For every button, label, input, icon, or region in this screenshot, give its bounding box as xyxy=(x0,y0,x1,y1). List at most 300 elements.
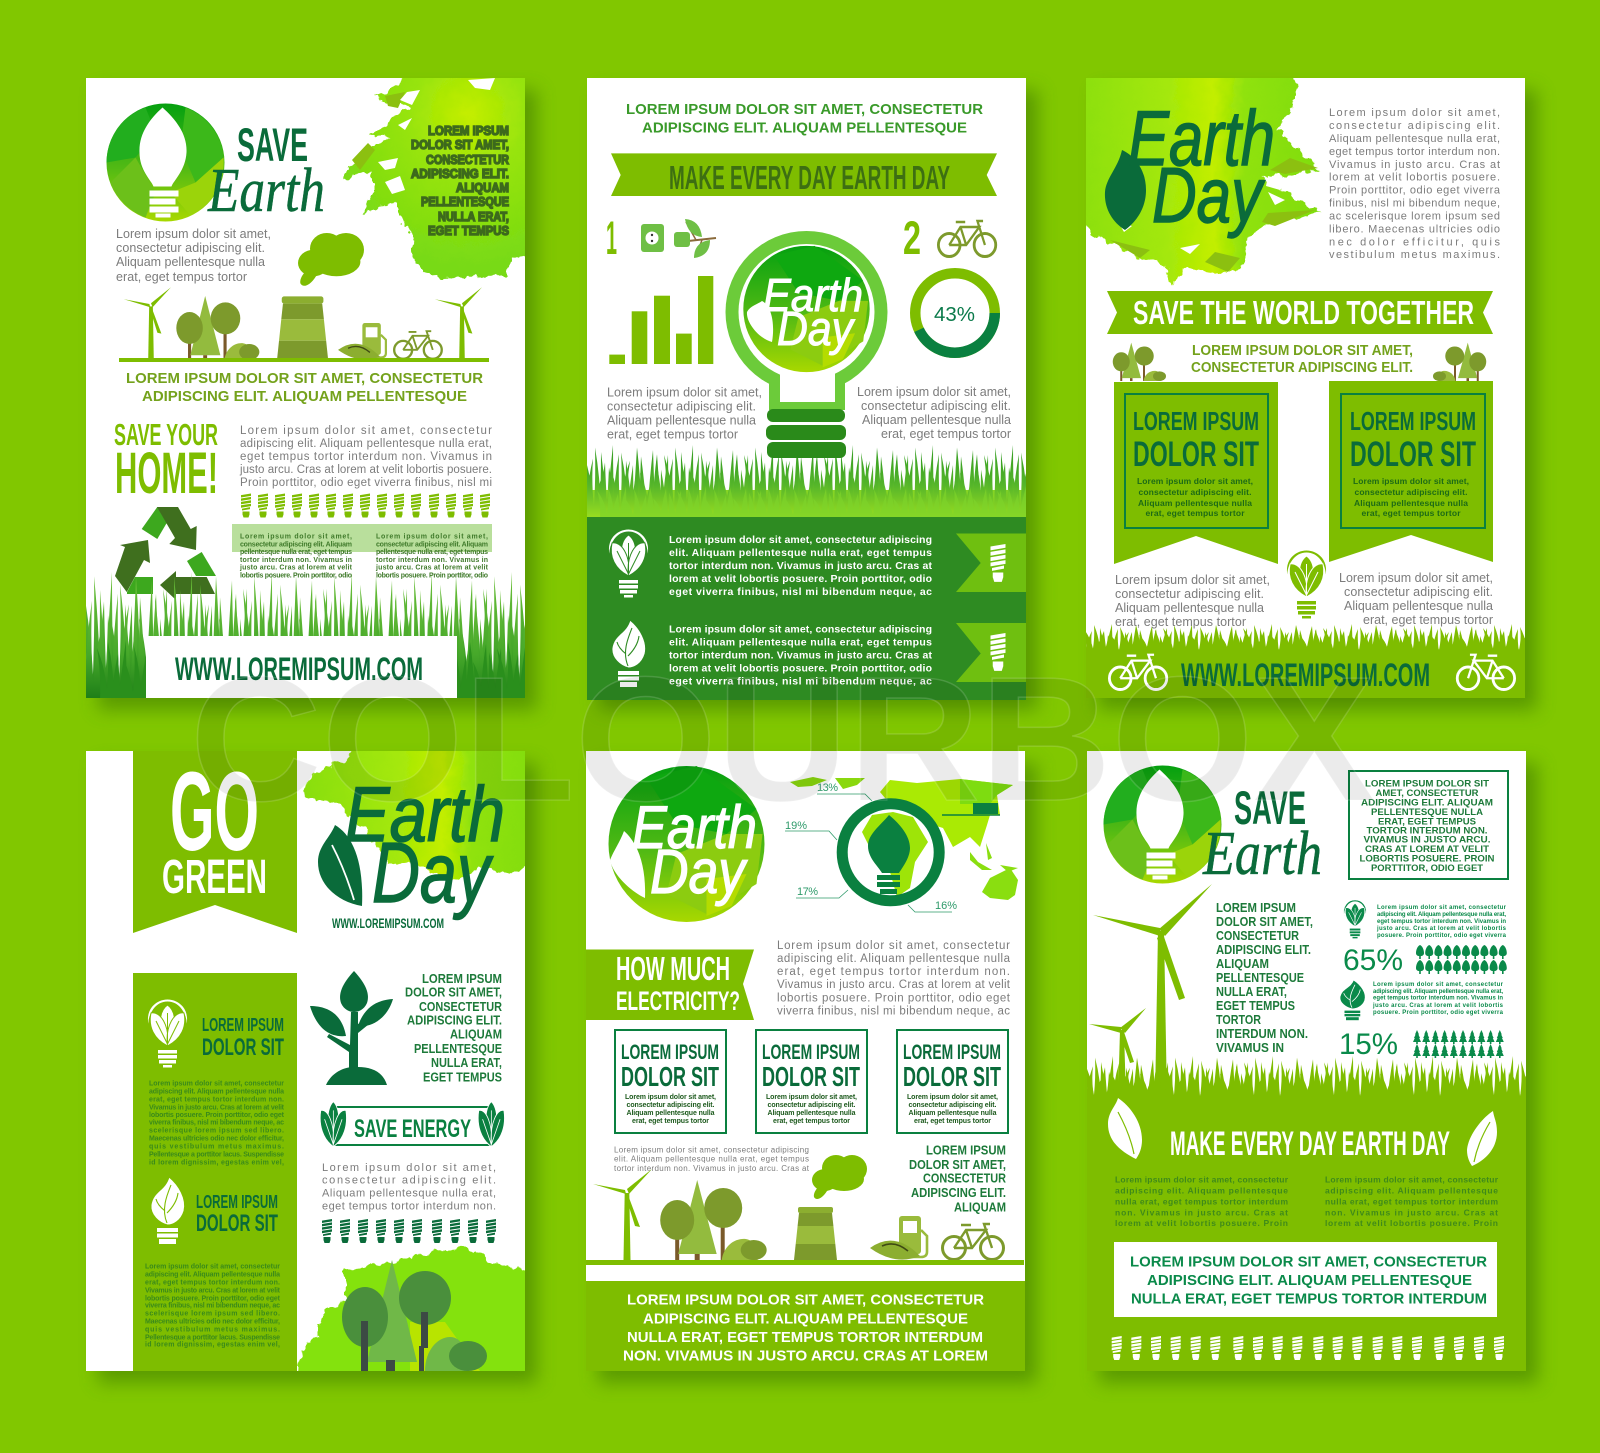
small text: tortor interdum non. Vivamus in justo arcu. Cras at xyxy=(614,1164,810,1173)
card 2 xyxy=(756,1030,867,1133)
list text: NULLA ERAT, xyxy=(1216,985,1287,999)
heading: ADIPISCING ELIT. ALIQUAM PELLENTESQUE xyxy=(642,120,967,136)
ribbon: how much electricity: HOW MUCH xyxy=(616,950,730,987)
right text: consectetur adipiscing elit. xyxy=(1344,585,1493,599)
band text 1: elit. Aliquam pellentesque nulla erat, eget tempus xyxy=(669,547,932,559)
card 2: Lorem ipsum dolor sit amet, xyxy=(766,1094,857,1101)
right heading text: ADIPISCING ELIT. xyxy=(911,1186,1006,1200)
side heading 1: LOREM IPSUM xyxy=(202,1015,284,1035)
icon: small leaf bulb xyxy=(1344,900,1366,938)
band text 1 xyxy=(669,534,932,598)
left text: erat, eget tempus tortor xyxy=(607,428,738,442)
card 3: DOLOR SIT xyxy=(903,1061,1001,1092)
left text: consectetur adipiscing elit. xyxy=(1115,587,1264,601)
text block: ac scelerisque lorem ipsum sed xyxy=(1329,210,1500,222)
body text: justo arcu. Cras at lorem at velit lobortis posuere. xyxy=(239,464,492,476)
icon: leaf bulb xyxy=(608,529,649,598)
heading: LOREM IPSUM DOLOR SIT AMET, CONSECTETUR xyxy=(626,101,983,118)
ribbon card left xyxy=(1114,382,1278,564)
banner: MAKE EVERY DAY EARTH DAY xyxy=(669,159,950,196)
ribbon card left: Lorem ipsum dolor sit amet, xyxy=(1137,476,1253,486)
small text: elit. Aliquam pellentesque nulla erat, eget tempus xyxy=(614,1154,809,1164)
subheading xyxy=(1191,343,1413,376)
panel: make every day earth day poster xyxy=(587,78,1026,700)
small text columns: justo arcu. Cras at lorem at velit xyxy=(375,564,489,572)
title: save earth: Earth xyxy=(207,157,325,225)
small text: Lorem ipsum dolor sit amet, consectetur adipiscing xyxy=(614,1146,809,1154)
right heading text: ALIQUAM xyxy=(954,1200,1006,1214)
text block: consectetur adipiscing elit. xyxy=(1329,120,1500,132)
boxed text: AMET, CONSECTETUR xyxy=(1376,788,1479,799)
two text columns: non. Vivamus in justo arcu. Cras at xyxy=(1115,1207,1288,1217)
title: earth day xyxy=(345,770,505,921)
map callouts: 17% xyxy=(797,886,818,898)
card 3: erat, eget tempus tortor xyxy=(914,1118,991,1125)
right text: PELLENTESQUE xyxy=(414,1042,502,1056)
panel: make every day earth day poster: 1 xyxy=(606,211,617,264)
right text xyxy=(405,972,502,1084)
card 2: erat, eget tempus tortor xyxy=(773,1118,850,1125)
small text columns: pellentesque nulla erat, eget tempus xyxy=(376,549,488,556)
heading: save your home: HOME! xyxy=(115,441,218,506)
bar chart xyxy=(609,276,713,364)
boxed text: VIVAMUS IN JUSTO ARCU. xyxy=(1364,835,1490,846)
side text 1: id lorem dignissim, egestas enim vel, xyxy=(149,1159,284,1166)
right text: Aliquam pellentesque nulla xyxy=(1344,599,1493,613)
right heading text: LOREM IPSUM xyxy=(926,1144,1006,1158)
card 1 xyxy=(615,1030,726,1133)
heading xyxy=(626,101,983,136)
side text 2: scelerisque lorem ipsum sed libero. xyxy=(145,1310,280,1317)
boxed text: ADIPISCING ELIT. ALIQUAM xyxy=(1361,797,1493,808)
card 3 xyxy=(897,1030,1008,1133)
list text: ADIPISCING ELIT. xyxy=(1216,943,1311,957)
boxed text xyxy=(1349,771,1508,879)
two text columns: non. Vivamus in justo arcu. Cras at xyxy=(1325,1207,1498,1217)
side text 1: scelerisque lorem ipsum sed libero. xyxy=(149,1127,284,1134)
side text 1: Pellentesque a porttitor lacus. Suspendisse xyxy=(149,1151,284,1158)
big light bulb with earth day globe: Day xyxy=(777,303,856,356)
small text 2: posuere. Proin porttitor, odio eget viverra xyxy=(1373,1010,1504,1016)
band text 1: tortor interdum non. Vivamus in justo arcu. Cras at xyxy=(669,560,932,572)
text block: nec dolor efficitur, quis xyxy=(1329,236,1500,248)
side text 1: viverra finibus, nisl mi bibendum neque, ac xyxy=(149,1119,284,1126)
body text: Aliquam pellentesque nulla erat, xyxy=(322,1188,496,1200)
title: earth day xyxy=(1128,94,1275,239)
small text columns: pellentesque nulla erat, eget tempus xyxy=(240,549,352,556)
side text 1: quis vestibulum metus maximus. xyxy=(149,1143,284,1150)
boxed text: PORTTITOR, ODIO EGET xyxy=(1371,863,1483,874)
band text 2 xyxy=(669,624,932,688)
website: WWW.LOREMIPSUM.COM xyxy=(1181,657,1430,693)
icon: white bicycle right xyxy=(1457,655,1515,690)
side text 2: Pellentesque a porttitor lacus. Suspendisse xyxy=(145,1334,280,1341)
small text columns: tortor interdum non. Vivamus in xyxy=(240,557,352,564)
bottom band: NULLA ERAT, EGET TEMPUS TORTOR INTERDUM xyxy=(627,1329,983,1346)
body text: Lorem ipsum dolor sit amet, consectetur xyxy=(240,425,492,437)
subheading xyxy=(126,370,483,405)
title: save earth: SAVE xyxy=(1234,781,1306,834)
intro text: consectetur adipiscing elit. xyxy=(116,241,265,255)
small text columns: justo arcu. Cras at lorem at velit xyxy=(239,564,353,572)
bottom band xyxy=(586,1281,1025,1371)
right text: ADIPISCING ELIT. xyxy=(407,1014,502,1028)
card 1: erat, eget tempus tortor xyxy=(632,1118,709,1125)
icon: plant xyxy=(310,971,393,1085)
subheading: ADIPISCING ELIT. ALIQUAM PELLENTESQUE xyxy=(142,388,467,405)
card 2: Aliquam pellentesque nulla xyxy=(768,1110,856,1117)
ribbon card left: LOREM IPSUM xyxy=(1133,406,1259,436)
body text: Lorem ipsum dolor sit amet, consectetur xyxy=(777,940,1010,952)
website box xyxy=(146,636,457,698)
subheading: CONSECTETUR ADIPISCING ELIT. xyxy=(1191,360,1413,376)
title: save earth: SAVE xyxy=(237,118,308,171)
card 3: consectetur adipiscing elit. xyxy=(908,1102,997,1109)
left text: Aliquam pellentesque nulla xyxy=(607,414,756,428)
ribbon card left: Aliquam pellentesque nulla xyxy=(1138,498,1252,508)
card 1: consectetur adipiscing elit. xyxy=(626,1102,715,1109)
band text 2: Lorem ipsum dolor sit amet, consectetur adipiscing xyxy=(669,624,932,636)
list text: TORTOR xyxy=(1216,1013,1261,1027)
text block: finibus, nisl mi bibendum neque, xyxy=(1329,198,1500,210)
intro text: Lorem ipsum dolor sit amet, xyxy=(116,227,271,241)
small text 1: eget tempus tortor interdum non. Vivamus in xyxy=(1377,919,1506,925)
side text 2 xyxy=(145,1263,281,1348)
tree pictogram 15 percent xyxy=(1413,1030,1504,1058)
icon: recycling arrows xyxy=(115,507,216,600)
number 2: 2 xyxy=(903,211,921,264)
bottom band: NON. VIVAMUS IN JUSTO ARCU. CRAS AT LOREM xyxy=(623,1348,988,1364)
map callouts: 16% xyxy=(935,900,957,912)
icon: white leaf bulb 2 xyxy=(151,1177,185,1244)
small text columns: Lorem ipsum dolor sit amet, xyxy=(240,534,352,540)
list text: DOLOR SIT AMET, xyxy=(1216,915,1313,929)
icon: leaf xyxy=(318,825,362,906)
ribbon card left: consectetur adipiscing elit. xyxy=(1138,487,1252,497)
bottom band: LOREM IPSUM DOLOR SIT AMET, CONSECTETUR xyxy=(627,1292,984,1308)
small text 2: Lorem ipsum dolor sit amet, consectetur xyxy=(1373,982,1504,988)
wind turbines xyxy=(1089,884,1212,1100)
body text: eget tempus tortor interdum non. Vivamus in xyxy=(240,451,492,463)
boxed text: ERAT, EGET TEMPUS xyxy=(1378,816,1476,827)
side text 1: Maecenas ultricies odio nec dolor efficitur, xyxy=(149,1135,284,1142)
title: save earth xyxy=(1202,781,1322,888)
two text columns: nulla erat, eget tempus tortor interdum xyxy=(1115,1196,1288,1206)
title: save earth xyxy=(207,118,325,225)
right text: LOREM IPSUM xyxy=(422,972,502,986)
bottom band: ADIPISCING ELIT. ALIQUAM PELLENTESQUE xyxy=(643,1310,968,1328)
dark text block on splash xyxy=(411,123,510,238)
dark text block on splash: EGET TEMPUS xyxy=(428,223,509,238)
left text xyxy=(1115,573,1270,629)
body text: adipiscing elit. Aliquam pellentesque nulla erat, xyxy=(240,438,492,450)
ribbon 1 xyxy=(956,534,1026,592)
text block: Proin porttitor, odio eget viverra xyxy=(1329,184,1501,196)
world map xyxy=(790,777,1018,901)
left text: Lorem ipsum dolor sit amet, xyxy=(1115,573,1270,587)
body text: lobortis posuere. Proin porttitor, odio eget xyxy=(777,992,1011,1004)
right text: EGET TEMPUS xyxy=(423,1070,502,1084)
two text columns: adipiscing elit. Aliquam pellentesque xyxy=(1325,1185,1498,1195)
body text: erat, eget tempus tortor interdum non. xyxy=(777,966,1010,978)
small text xyxy=(614,1146,810,1173)
ribbon card left: DOLOR SIT xyxy=(1133,435,1259,474)
side text 1: Vivamus in justo arcu. Cras at lorem at velit xyxy=(149,1104,285,1111)
globe with earth day title xyxy=(608,766,764,922)
title: earth day: Day xyxy=(1152,151,1265,239)
highlight band xyxy=(232,524,492,552)
list text: CONSECTETUR xyxy=(1216,929,1299,943)
small text columns: consectetur adipiscing elit. Aliquam xyxy=(376,542,488,548)
side text 2: Vivamus in justo arcu. Cras at lorem at velit xyxy=(145,1287,281,1294)
band text 1: Lorem ipsum dolor sit amet, consectetur adipiscing xyxy=(669,534,932,546)
icon: white bicycle left xyxy=(1109,655,1167,690)
title: save earth: Earth xyxy=(1202,820,1322,888)
ribbon: how much electricity: ELECTRICITY? xyxy=(616,986,740,1016)
ribbon card right: consectetur adipiscing elit. xyxy=(1354,487,1468,497)
band text 2: lorem at velit lobortis posuere. Proin porttitor, odio xyxy=(669,662,932,674)
heading: save your home: SAVE YOUR xyxy=(114,417,218,452)
side text 2: quis vestibulum metus maximus. xyxy=(145,1326,280,1333)
side panel xyxy=(133,973,297,1371)
row of white bulbs xyxy=(1112,1336,1504,1360)
body text xyxy=(322,1162,496,1212)
ribbon card left: erat, eget tempus tortor xyxy=(1146,508,1245,518)
body text xyxy=(777,940,1011,1018)
side text 2: id lorem dignissim, egestas enim vel, xyxy=(145,1341,280,1348)
save energy badge: SAVE ENERGY xyxy=(354,1115,471,1143)
ribbon card right: DOLOR SIT xyxy=(1350,435,1476,474)
left text: Aliquam pellentesque nulla xyxy=(1115,601,1264,615)
dark text block on splash: NULLA ERAT, xyxy=(438,209,509,224)
subheading: LOREM IPSUM DOLOR SIT AMET, CONSECTETUR xyxy=(126,370,483,387)
banner xyxy=(611,153,997,196)
text block: Vivamus in justo arcu. Cras at xyxy=(1329,159,1500,171)
card 2: consectetur adipiscing elit. xyxy=(768,1102,856,1109)
dark text block on splash: PELLENTESQUE xyxy=(421,194,509,209)
list text xyxy=(1216,901,1313,1055)
watermark: COLOURBOX xyxy=(190,640,1375,838)
body text: Vivamus in justo arcu. Cras at lorem at velit xyxy=(777,979,1011,991)
dark text block on splash: CONSECTETUR xyxy=(426,152,510,167)
grass xyxy=(86,572,525,698)
icon: globe with leaf bulb xyxy=(106,104,224,222)
intro text xyxy=(116,227,271,284)
band text 2: eget viverra finibus, nisl mi bibendum neque, ac xyxy=(669,676,932,688)
subheading: LOREM IPSUM DOLOR SIT AMET, xyxy=(1192,343,1413,359)
side text 1: erat, eget tempus tortor interdum non. xyxy=(149,1096,284,1103)
left text: Lorem ipsum dolor sit amet, xyxy=(607,386,762,400)
body text: viverra finibus, nisl mi bibendum neque, ac xyxy=(777,1006,1010,1018)
dark text block on splash: DOLOR SIT AMET, xyxy=(411,137,509,152)
ribbon card right: Aliquam pellentesque nulla xyxy=(1354,498,1468,508)
right text: Aliquam pellentesque nulla xyxy=(862,413,1011,427)
band text 2: tortor interdum non. Vivamus in justo arcu. Cras at xyxy=(669,650,932,662)
right text: NULLA ERAT, xyxy=(431,1056,502,1070)
globe with earth day title: Day xyxy=(650,838,748,907)
side text 2: lobortis posuere. Proin porttitor, odio eget xyxy=(145,1295,281,1302)
card 1: Aliquam pellentesque nulla xyxy=(626,1110,715,1117)
side heading 2: LOREM IPSUM xyxy=(196,1192,278,1212)
two text columns: Lorem ipsum dolor sit amet, consectetur xyxy=(1325,1174,1499,1184)
left text: erat, eget tempus tortor xyxy=(1115,615,1246,629)
side text 1: adipiscing elit. Aliquam pellentesque nulla xyxy=(149,1088,284,1095)
side text 2: adipiscing elit. Aliquam pellentesque nulla xyxy=(145,1271,280,1278)
icon: dark leaf xyxy=(1105,150,1146,230)
band text 1: eget viverra finibus, nisl mi bibendum neque, ac xyxy=(669,586,932,598)
small trees xyxy=(1113,343,1486,381)
card 3: Aliquam pellentesque nulla xyxy=(908,1110,997,1117)
text block: eget tempus tortor interdum non. xyxy=(1329,146,1500,158)
card 2: LOREM IPSUM xyxy=(762,1041,860,1064)
right heading text xyxy=(909,1144,1006,1214)
body text: adipiscing elit. Aliquam pellentesque nulla xyxy=(777,953,1011,965)
body text: consectetur adipiscing elit. xyxy=(322,1174,496,1186)
side heading 1 xyxy=(202,1015,284,1061)
list text: ALIQUAM xyxy=(1216,957,1269,971)
ribbon 2 xyxy=(956,623,1026,682)
row of bulbs xyxy=(322,1219,496,1243)
card 1: Lorem ipsum dolor sit amet, xyxy=(625,1094,716,1101)
body text: Proin porttitor, odio eget viverra finibus, nisl mi xyxy=(240,477,492,489)
icon: socket xyxy=(641,224,664,252)
right text: erat, eget tempus tortor xyxy=(881,427,1011,441)
text block: vestibulum metus maximus. xyxy=(1329,249,1500,261)
globe with earth day title: Earth xyxy=(632,794,757,861)
icon: green leaf bulb xyxy=(1286,550,1327,618)
stat: 15 percent: 15% xyxy=(1339,1028,1398,1061)
boxed text: LOREM IPSUM DOLOR SIT xyxy=(1365,779,1489,790)
panel: save the world together poster xyxy=(1086,78,1525,698)
ribbon: go green: GO xyxy=(170,749,259,874)
list text: LOREM IPSUM xyxy=(1216,901,1296,915)
intro text: erat, eget tempus tortor xyxy=(116,270,247,284)
text block: Aliquam pellentesque nulla erat, xyxy=(1329,133,1500,145)
boxed text: CRAS AT LOREM AT VELIT xyxy=(1365,844,1489,855)
dark text block on splash: ALIQUAM xyxy=(456,180,509,195)
right heading text: CONSECTETUR xyxy=(923,1172,1006,1186)
list text: INTERDUM NON. xyxy=(1216,1027,1308,1041)
small text 1: Lorem ipsum dolor sit amet, consectetur xyxy=(1377,905,1507,911)
ribbon: how much electricity xyxy=(586,950,754,1020)
card 1: DOLOR SIT xyxy=(621,1061,719,1092)
save energy badge xyxy=(320,1102,504,1147)
card 1: LOREM IPSUM xyxy=(621,1041,719,1064)
left text xyxy=(607,386,762,442)
ribbon card right: Lorem ipsum dolor sit amet, xyxy=(1353,476,1469,486)
text block: lorem at velit lobortis posuere. xyxy=(1329,172,1500,184)
right text: Lorem ipsum dolor sit amet, xyxy=(1339,571,1493,585)
small text 1 xyxy=(1376,905,1507,939)
small text columns: lobortis posuere. Proin porttitor, odio xyxy=(240,572,352,580)
body text xyxy=(239,425,492,489)
two text columns: lorem at velit lobortis posuere. Proin xyxy=(1115,1218,1288,1228)
icon: white leaf left xyxy=(1108,1098,1142,1159)
two text columns: adipiscing elit. Aliquam pellentesque xyxy=(1115,1185,1288,1195)
two text columns: Lorem ipsum dolor sit amet, consectetur xyxy=(1115,1174,1289,1184)
icon: bicycle xyxy=(938,221,996,256)
panel: go green poster xyxy=(86,735,545,1385)
small text 1: justo arcu. Cras at lorem at velit lobortis xyxy=(1376,926,1507,932)
small text 2: adipiscing elit. Aliquam pellentesque nulla erat, xyxy=(1373,989,1503,995)
right text: erat, eget tempus tortor xyxy=(1363,613,1493,627)
right text: consectetur adipiscing elit. xyxy=(861,399,1011,413)
text block: Lorem ipsum dolor sit amet, xyxy=(1329,107,1500,119)
side text 1 xyxy=(149,1081,285,1166)
side text 1: Lorem ipsum dolor sit amet, consectetur xyxy=(149,1081,284,1088)
big light bulb with earth day globe xyxy=(726,231,888,458)
map callouts: 13% xyxy=(817,782,838,794)
white callout box: NULLA ERAT, EGET TEMPUS TORTOR INTERDUM xyxy=(1131,1290,1487,1308)
map callouts xyxy=(785,782,1000,912)
text block: libero. Maecenas ultricies odio xyxy=(1329,224,1500,236)
body text: Lorem ipsum dolor sit amet, xyxy=(322,1162,496,1174)
ribbon: go green xyxy=(133,749,297,933)
icon: leaf bulb 2 xyxy=(612,620,646,687)
small text 1: adipiscing elit. Aliquam pellentesque nulla erat, xyxy=(1377,912,1506,918)
right text xyxy=(857,385,1011,441)
green paint splash xyxy=(1086,78,1322,286)
ribbon card right: erat, eget tempus tortor xyxy=(1362,508,1461,518)
list text: VIVAMUS IN xyxy=(1216,1041,1284,1055)
card 2: DOLOR SIT xyxy=(762,1061,860,1092)
side heading 1: DOLOR SIT xyxy=(202,1034,284,1061)
grass and green base xyxy=(1087,1056,1526,1371)
website box: WWW.LOREMIPSUM.COM xyxy=(175,651,423,687)
splash top xyxy=(303,751,525,880)
icon: small leaf bulb 2 xyxy=(1340,980,1365,1020)
right text: Lorem ipsum dolor sit amet, xyxy=(857,385,1011,399)
title: earth day: Earth xyxy=(1128,94,1275,182)
donut chart xyxy=(915,273,995,353)
two text columns: nulla erat, eget tempus tortor interdum xyxy=(1325,1196,1498,1206)
heading: save your home xyxy=(114,417,218,506)
two text columns xyxy=(1115,1174,1499,1228)
banner xyxy=(1107,291,1493,334)
side text 2: Lorem ipsum dolor sit amet, consectetur xyxy=(145,1263,280,1270)
row of bulbs xyxy=(241,494,490,518)
map callouts: 19% xyxy=(785,820,807,832)
right text xyxy=(1339,571,1493,627)
text block xyxy=(1329,107,1501,261)
right text: CONSECTETUR xyxy=(419,1000,502,1014)
two text columns: lorem at velit lobortis posuere. Proin xyxy=(1325,1218,1498,1228)
side text 2: viverra finibus, nisl mi bibendum neque, ac xyxy=(145,1302,280,1309)
intro text: Aliquam pellentesque nulla xyxy=(116,255,265,269)
left text: consectetur adipiscing elit. xyxy=(607,400,756,414)
small text columns: tortor interdum non. Vivamus in xyxy=(376,557,488,564)
grass xyxy=(587,445,1026,517)
boxed text: PELLENTESQUE NULLA xyxy=(1371,807,1483,818)
tree pictogram 65 percent xyxy=(1416,945,1507,974)
icon: white leaf bulb xyxy=(147,999,188,1068)
website: WWW.LOREMIPSUM.COM xyxy=(332,915,444,931)
ribbon card right xyxy=(1329,381,1493,562)
card 3: Lorem ipsum dolor sit amet, xyxy=(907,1094,998,1101)
right text: ALIQUAM xyxy=(450,1028,502,1042)
stat: 65 percent: 65% xyxy=(1343,944,1403,977)
eco scene xyxy=(119,233,489,362)
ribbon card right: LOREM IPSUM xyxy=(1350,406,1476,436)
icon: branch xyxy=(674,219,716,258)
side text 1: lobortis posuere. Proin porttitor, odio eget xyxy=(149,1112,285,1119)
small text columns: lobortis posuere. Proin porttitor, odio xyxy=(376,572,488,580)
white callout box: ADIPISCING ELIT. ALIQUAM PELLENTESQUE xyxy=(1147,1272,1472,1289)
icon: white leaf right xyxy=(1467,1111,1497,1166)
list text: EGET TEMPUS xyxy=(1216,999,1295,1013)
right text: DOLOR SIT AMET, xyxy=(405,986,502,1000)
small text 2 xyxy=(1372,982,1504,1016)
